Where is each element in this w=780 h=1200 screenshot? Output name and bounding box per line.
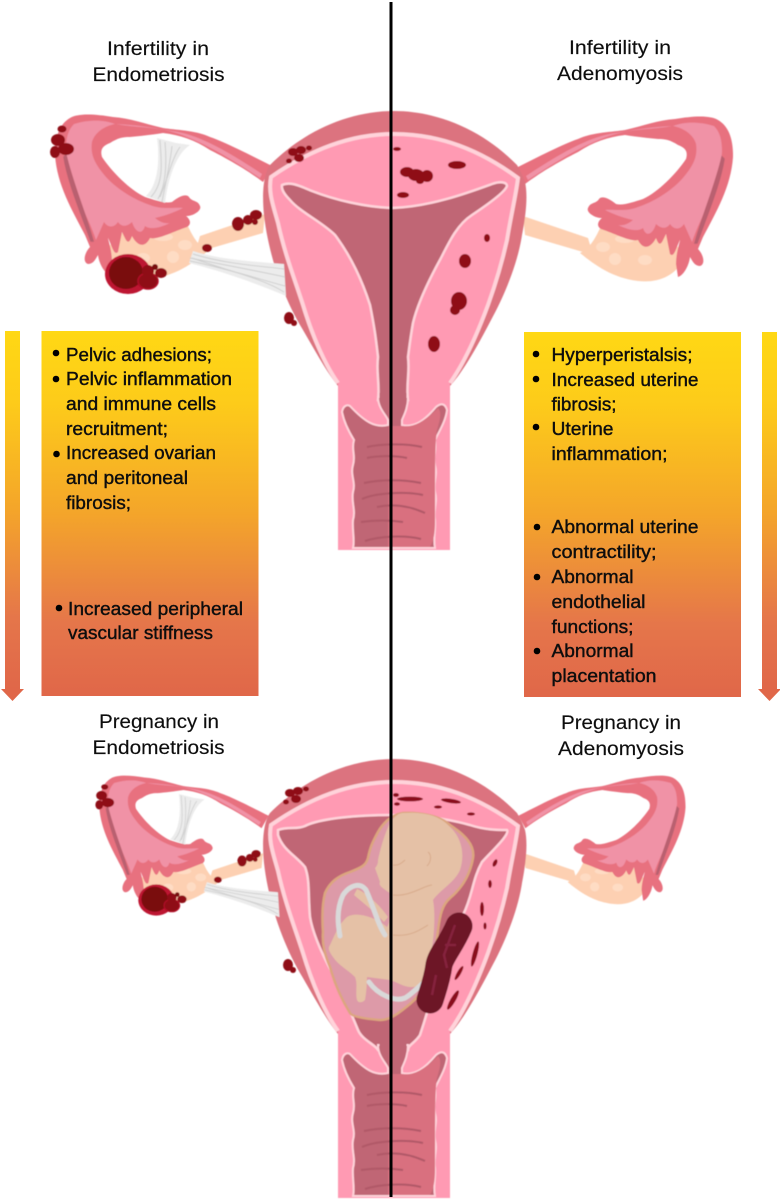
panel: adenomyosis mechanisms: Abnormal <box>552 641 634 661</box>
panel: adenomyosis mechanisms <box>524 332 741 697</box>
panel: adenomyosis mechanisms: fibrosis; <box>552 394 616 414</box>
panel: adenomyosis mechanisms: Increased uterine <box>552 370 698 390</box>
lower uterus <box>263 759 526 1198</box>
heading: pregnancy in adenomyosis: Pregnancy in <box>561 713 681 734</box>
upper left fallopian tube and ovary <box>55 114 272 279</box>
upper right adenomyosis lesions <box>393 147 490 352</box>
lower right adenomyosis lesions <box>393 793 499 1011</box>
heading: pregnancy in endometriosis: Endometriosis <box>92 738 224 759</box>
umbilical cord <box>338 885 427 999</box>
lower uterine cavity <box>278 815 507 1050</box>
panel: adenomyosis mechanisms: placentation <box>552 666 656 686</box>
heading: infertility in endometriosis: Endometriosis <box>92 65 224 86</box>
lower adhesion to uterus wall <box>204 882 279 917</box>
lower cervix and vagina <box>342 1041 447 1196</box>
panel: adenomyosis mechanisms: Abnormal uterine <box>552 517 698 537</box>
panel: endometriosis mechanisms: recruitment; <box>66 419 168 439</box>
panel: endometriosis mechanisms: Increased peripheral <box>68 599 243 619</box>
panel: adenomyosis mechanisms: Hyperperistalsis; <box>552 345 692 365</box>
panel: adenomyosis mechanisms: contractility; <box>552 542 656 562</box>
lower left endometriosis lesions <box>283 786 309 973</box>
heading: pregnancy in adenomyosis: Adenomyosis <box>558 739 684 760</box>
fetus <box>329 813 462 1002</box>
panel: adenomyosis mechanisms: functions; <box>552 617 634 637</box>
panel: endometriosis mechanisms: Increased ovarian <box>66 443 216 463</box>
placenta blood clot <box>430 925 459 1000</box>
panel: endometriosis mechanisms: Pelvic adhesions; <box>66 345 212 365</box>
heading: infertility in adenomyosis: Adenomyosis <box>557 64 683 85</box>
center divider line <box>390 2 392 1197</box>
panel: endometriosis mechanisms: and peritoneal <box>66 468 188 488</box>
lower right fallopian tube and ovary <box>518 776 686 904</box>
panel: endometriosis mechanisms <box>42 331 258 696</box>
right gradient arrow <box>758 332 780 701</box>
upper adhesions <box>146 138 286 296</box>
upper uterine cavity <box>282 182 507 400</box>
panel: adenomyosis mechanisms: Abnormal <box>552 567 634 587</box>
upper right fallopian tube and ovary <box>516 116 733 281</box>
heading: infertility in endometriosis: Infertility in <box>107 39 209 60</box>
panel: adenomyosis mechanisms: Uterine <box>552 419 614 439</box>
heading: infertility in adenomyosis: Infertility in <box>569 38 671 59</box>
left gradient arrow <box>1 331 24 701</box>
panel: adenomyosis mechanisms: endothelial <box>552 592 646 612</box>
upper uterus <box>263 111 526 550</box>
panel: endometriosis mechanisms: Pelvic inflammation <box>66 369 232 389</box>
panel: endometriosis mechanisms: vascular stiffness <box>68 623 213 643</box>
amniotic sac <box>322 813 473 1020</box>
heading: pregnancy in endometriosis: Pregnancy in <box>99 712 219 733</box>
panel: endometriosis mechanisms: fibrosis; <box>66 493 131 513</box>
upper left endometriosis lesions <box>50 126 312 326</box>
panel: endometriosis mechanisms: and immune cells <box>66 394 216 414</box>
panel: adenomyosis mechanisms: inflammation; <box>552 444 668 464</box>
lower left fallopian tube and ovary <box>95 776 269 916</box>
